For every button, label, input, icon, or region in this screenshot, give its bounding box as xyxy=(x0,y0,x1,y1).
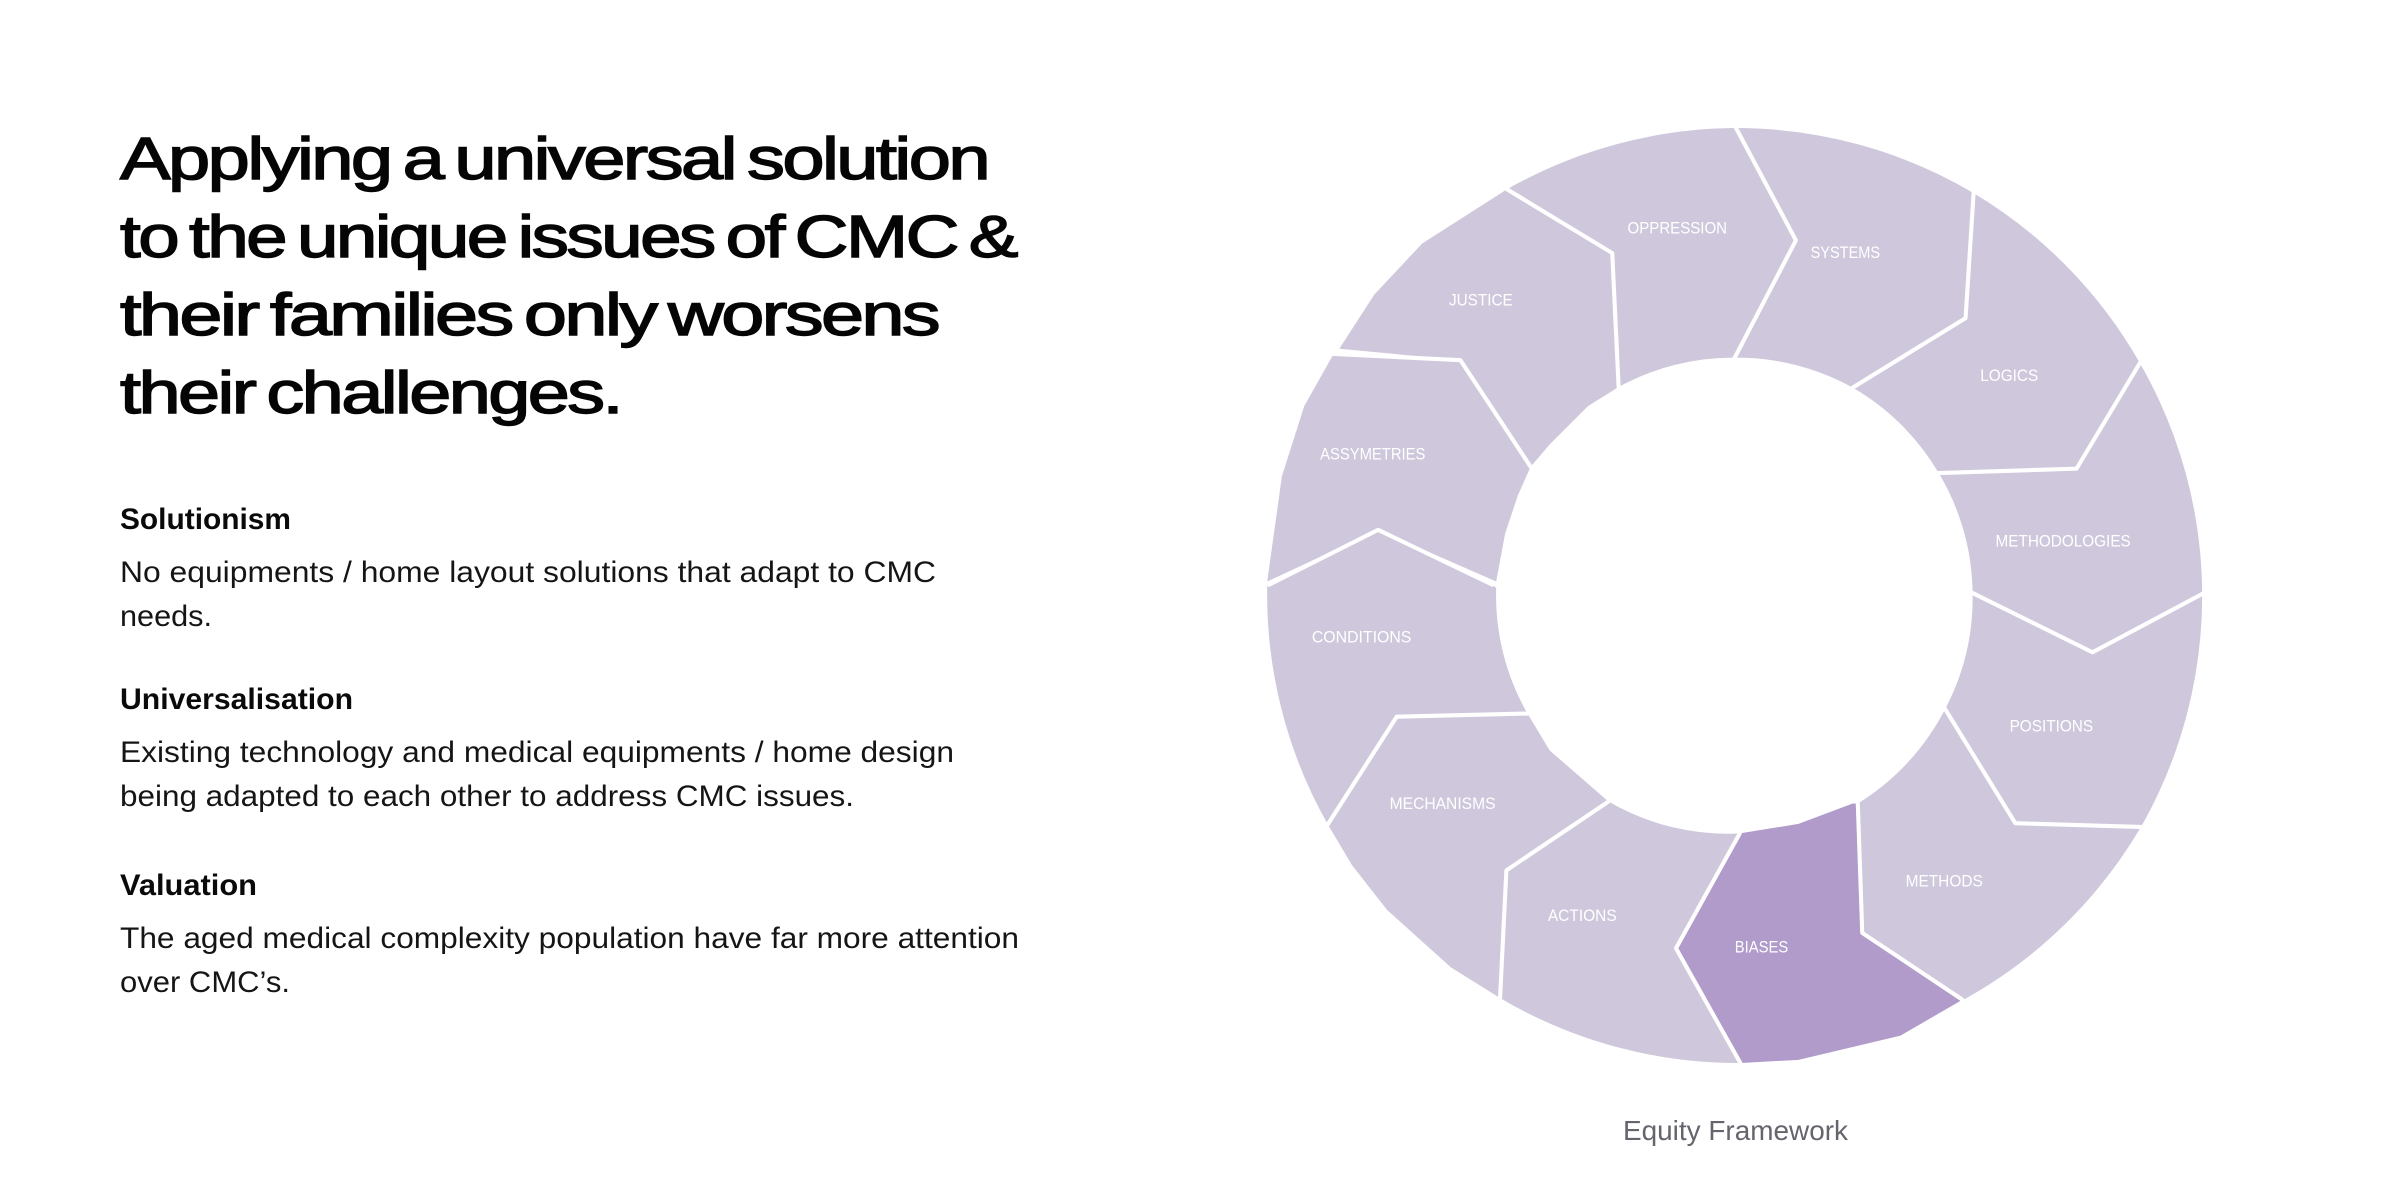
text block: Universalisation: Universalisation xyxy=(120,683,353,716)
segment: mechanisms: MECHANISMS xyxy=(1390,794,1496,813)
title: Applying a universal solution xyxy=(120,126,988,192)
text block: Valuation: The aged medical complexity population have far more attention xyxy=(120,922,1019,955)
segment: methodologies xyxy=(1939,363,2202,652)
text block: Universalisation xyxy=(120,683,954,813)
title: their families only worsens xyxy=(120,282,939,348)
segment: positions xyxy=(1945,593,2202,827)
segment: methodologies: METHODOLOGIES xyxy=(1996,531,2131,550)
text block: Universalisation: being adapted to each other to address CMC issues. xyxy=(120,780,854,813)
segment: methods xyxy=(1858,709,2141,999)
segment: assymetries: ASSYMETRIES xyxy=(1320,445,1425,464)
segment: systems xyxy=(1735,128,1973,388)
text block: Universalisation: Existing technology and medical equipments / home design xyxy=(120,736,954,769)
text block: Solutionism xyxy=(120,503,936,633)
title: their challenges. xyxy=(120,360,621,426)
title: to the unique issues of CMC & xyxy=(120,204,1018,270)
segment: oppression xyxy=(1507,128,1796,387)
segment: systems: SYSTEMS xyxy=(1811,243,1880,262)
segment: actions xyxy=(1500,802,1741,1063)
segment: logics xyxy=(1853,192,2140,473)
text block: Solutionism: needs. xyxy=(120,600,212,633)
segment: biases (highlighted): BIASES xyxy=(1735,938,1788,957)
segment: mechanisms xyxy=(1328,714,1608,998)
segment: actions: ACTIONS xyxy=(1548,906,1617,925)
segment: justice: JUSTICE xyxy=(1449,290,1513,309)
caption: Equity Framework xyxy=(1623,1115,1849,1146)
title xyxy=(120,126,1018,426)
segment: justice xyxy=(1339,189,1619,467)
text block: Valuation xyxy=(120,869,1019,999)
segment: oppression: OPPRESSION xyxy=(1628,218,1727,237)
segment: logics: LOGICS xyxy=(1980,366,2038,385)
segment: conditions: CONDITIONS xyxy=(1312,628,1411,647)
text block: Valuation: Valuation xyxy=(120,869,257,902)
text block: Valuation: over CMC’s. xyxy=(120,966,290,999)
segment: assymetries xyxy=(1267,355,1531,582)
text block: Solutionism: No equipments / home layout solutions that adapt to CMC xyxy=(120,556,936,589)
segment: conditions xyxy=(1267,530,1527,824)
segment: methods: METHODS xyxy=(1906,871,1983,890)
segment: biases (highlighted) xyxy=(1676,803,1961,1063)
chart: equity framework ring xyxy=(1267,126,2205,1064)
segment: positions: POSITIONS xyxy=(2010,716,2093,735)
text block: Solutionism: Solutionism xyxy=(120,503,291,536)
